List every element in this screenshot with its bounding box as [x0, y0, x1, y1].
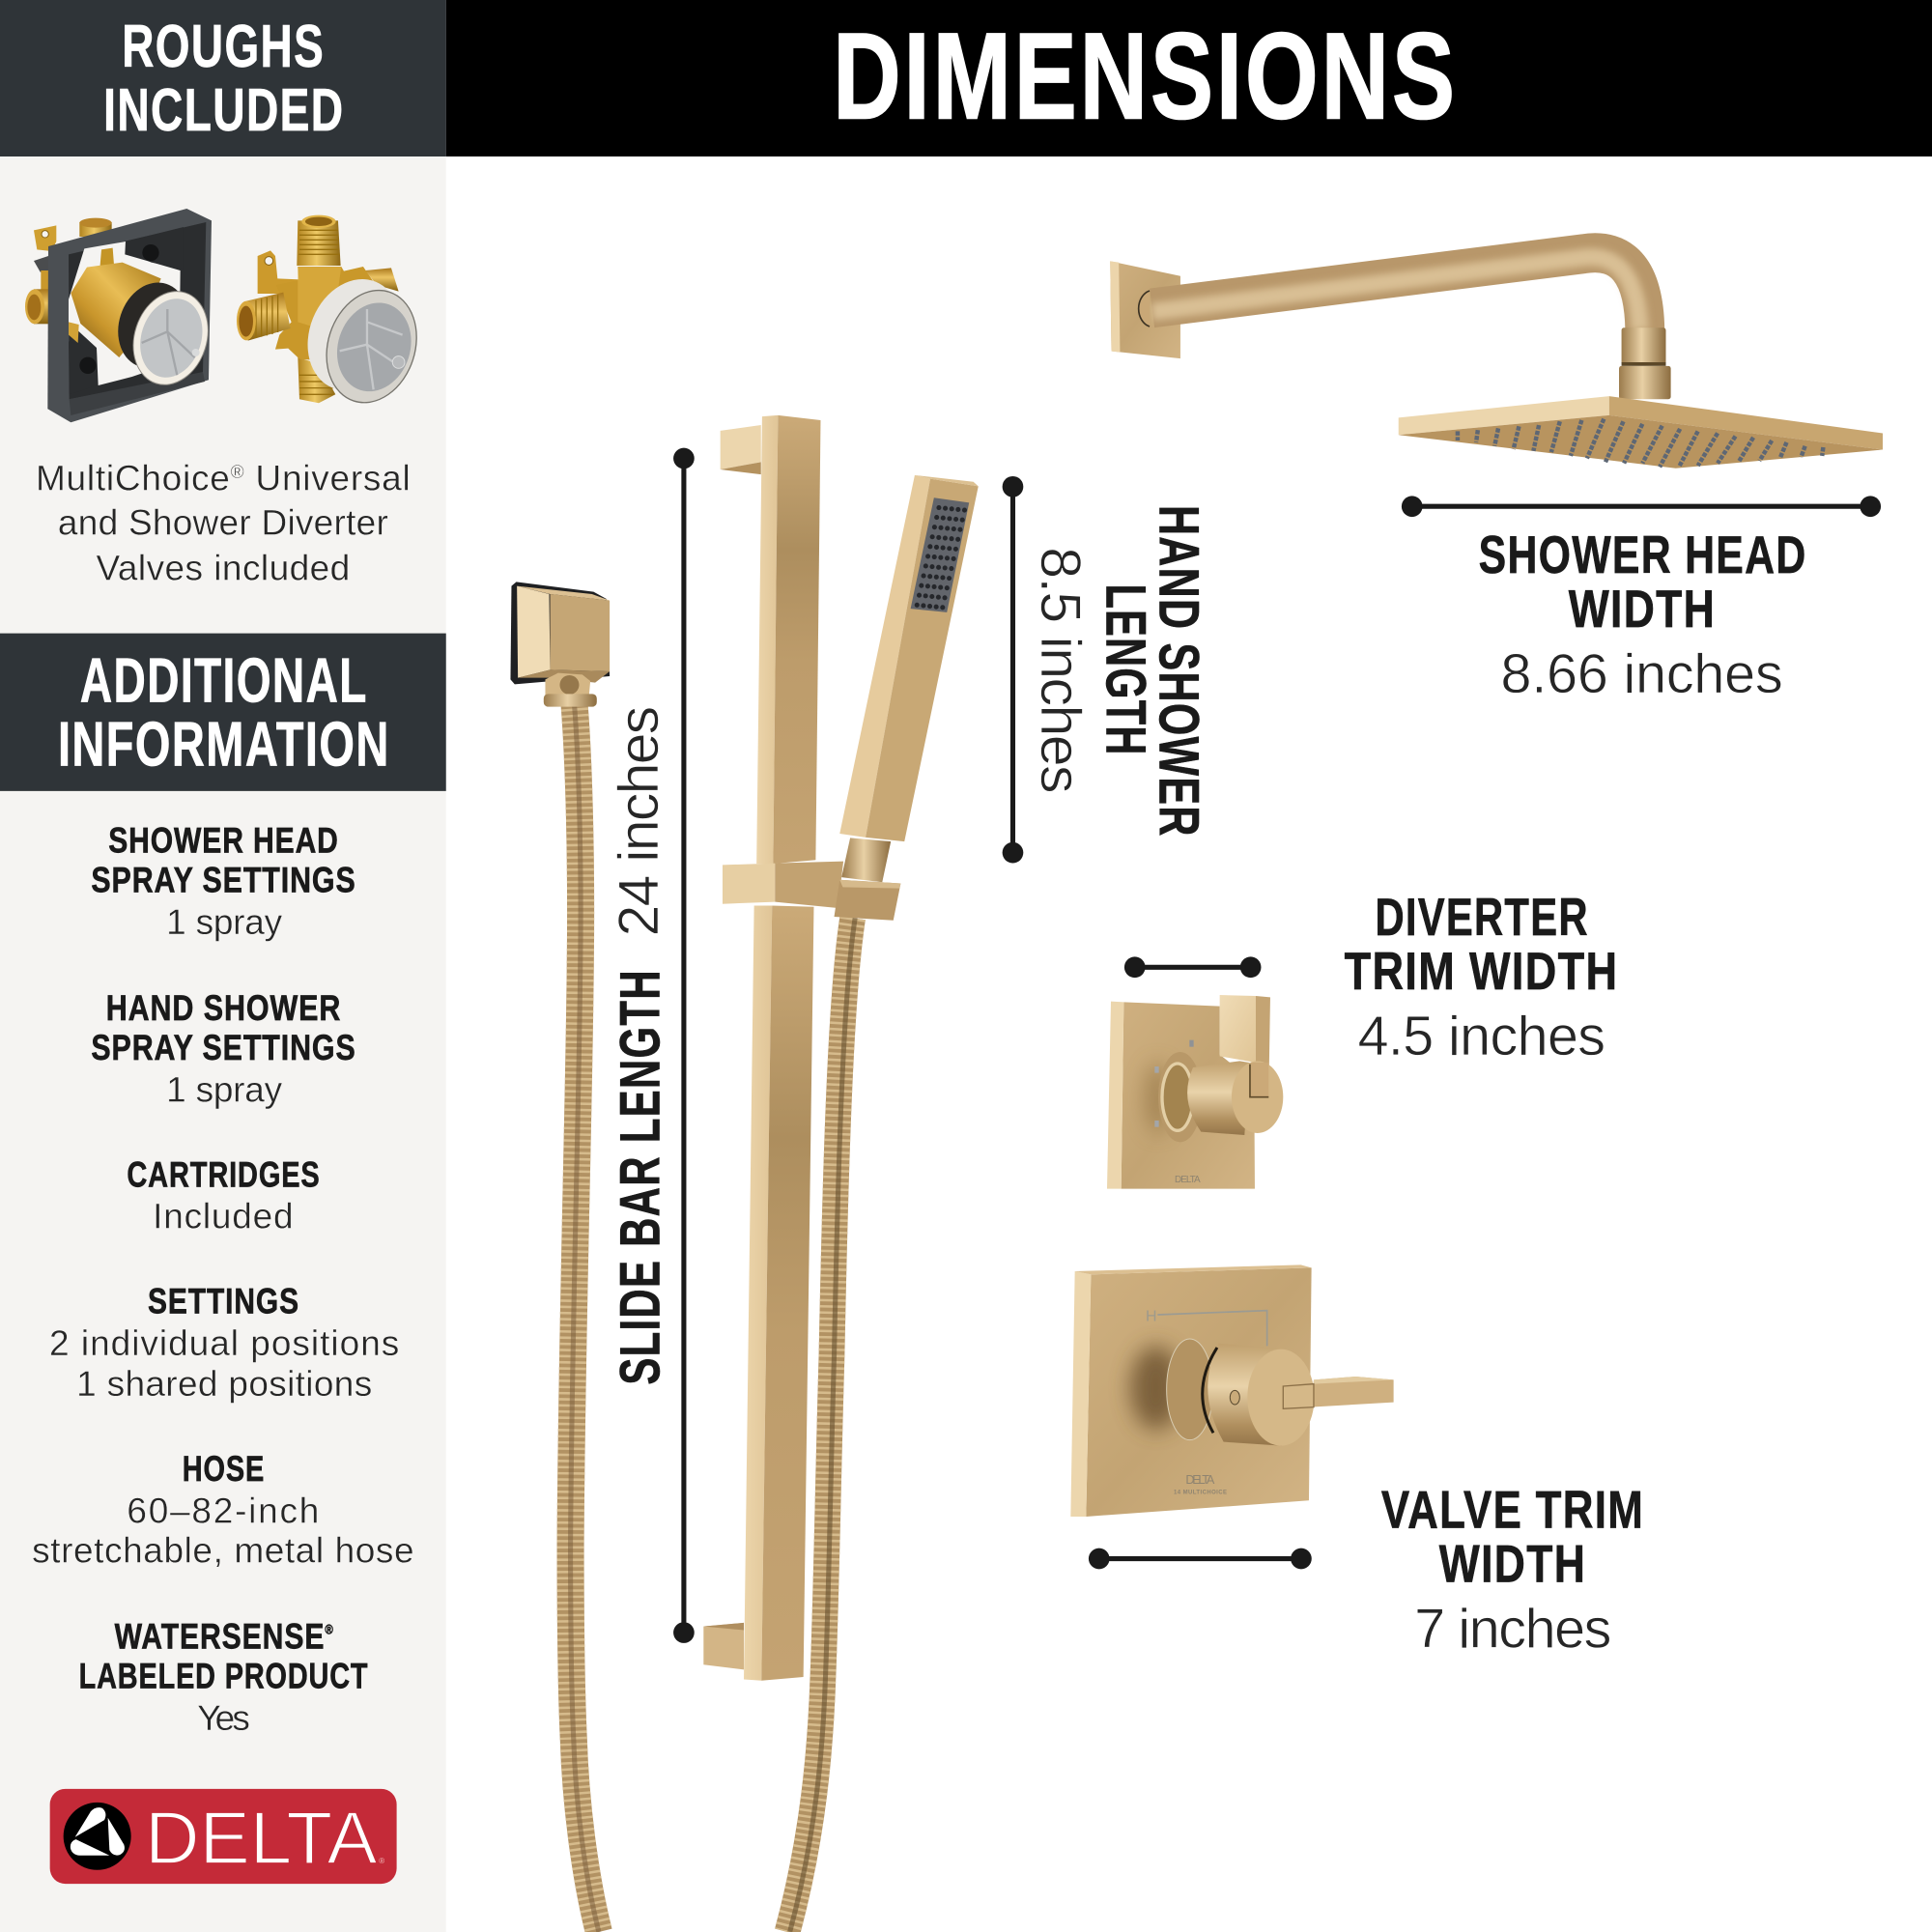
spec: settings: [49, 1282, 399, 1404]
text: rough valves description: ®: [231, 463, 244, 483]
icon: rough valve in mounting frame: [25, 209, 219, 422]
dimension: hand shower length: [1003, 476, 1209, 863]
icon: right hose: [787, 918, 855, 1932]
wall outlet block: [510, 582, 610, 707]
text: rough valves description: and Shower Diverter: [58, 503, 388, 543]
spec: cartridges: CARTRIDGES: [127, 1154, 321, 1194]
spec: cartridges: Included: [153, 1197, 294, 1236]
icon: slide bar collar and holder: [723, 838, 900, 921]
logo: delta: DELTA: [145, 1797, 378, 1880]
icon: diverter trim: DELTA: [1175, 1175, 1201, 1185]
dimension: hand shower length: LENGTH: [1094, 584, 1156, 756]
spec: settings: 1 shared positions: [76, 1364, 372, 1404]
spec: hose: [32, 1449, 414, 1570]
spec: watersense: Yes: [197, 1698, 250, 1738]
dimension: valve trim width: 7 inches: [1414, 1598, 1611, 1660]
spec: settings: SETTINGS: [148, 1282, 299, 1321]
spec: shower head spray settings: SPRAY SETTINGS: [91, 860, 356, 899]
spec: shower head spray settings: [91, 821, 356, 942]
icon: valve trim: DELTA: [1185, 1473, 1215, 1487]
icon: wall outlet and left hose: [510, 582, 610, 1932]
header: additional information: [0, 634, 446, 791]
title banner: dimensions: [446, 0, 1932, 156]
dimension: shower head width: 8.66 inches: [1501, 643, 1783, 705]
spec: hand shower spray settings: [91, 988, 356, 1109]
dimension: valve trim width: [1089, 1480, 1644, 1660]
text: rough valves description: Valves included: [96, 549, 350, 588]
dimension: slide bar length: [608, 448, 695, 1643]
icon: shower arm and rain head: [1110, 253, 1883, 469]
text: rough valves description: Universal: [244, 459, 411, 498]
icon: diverter trim: [1107, 995, 1283, 1189]
icon: valve trim: H: [1146, 1309, 1157, 1325]
spec: cartridges: [127, 1154, 321, 1236]
dimension: hand shower length: 8.5 inches: [1029, 547, 1092, 793]
spec: hand shower spray settings: SPRAY SETTINGS: [91, 1028, 356, 1067]
icon: hand shower: [839, 475, 979, 841]
spec: watersense: [79, 1617, 368, 1738]
title banner: dimensions: DIMENSIONS: [833, 8, 1458, 145]
logo: delta: ®: [379, 1857, 384, 1865]
logo: delta: [50, 1789, 397, 1884]
spec: shower head spray settings: SHOWER HEAD: [108, 821, 339, 861]
dimension: valve trim width: WIDTH: [1439, 1534, 1586, 1594]
icon: valve trim: [1070, 1264, 1394, 1517]
spec: hose: stretchable, metal hose: [32, 1530, 414, 1570]
spec: hand shower spray settings: HAND SHOWER: [106, 988, 341, 1028]
spec: hand shower spray settings: 1 spray: [166, 1069, 283, 1109]
header: roughs included: ROUGHS: [122, 13, 325, 80]
dimension: diverter trim width: [1124, 887, 1618, 1067]
dimension: diverter trim width: DIVERTER: [1375, 887, 1589, 947]
header: additional information: ADDITIONAL: [80, 644, 368, 715]
dimension: shower head width: WIDTH: [1569, 579, 1716, 639]
spec: shower head spray settings: 1 spray: [166, 902, 283, 942]
dimension: slide bar length: 24 inches: [608, 706, 670, 936]
spec: watersense: ®: [325, 1621, 334, 1636]
spec: settings: 2 individual positions: [49, 1323, 399, 1363]
spec: watersense: WATERSENSE: [115, 1617, 373, 1657]
dimension: diverter trim width: TRIM WIDTH: [1345, 941, 1618, 1001]
spec: hose: 60–82-inch: [127, 1492, 319, 1531]
dimension: valve trim width: VALVE TRIM: [1381, 1480, 1644, 1540]
text: rough valves description: [36, 459, 411, 588]
header: roughs included: INCLUDED: [103, 76, 345, 144]
spec: watersense: LABELED PRODUCT: [79, 1656, 368, 1695]
spec: hose: HOSE: [183, 1449, 265, 1489]
left sidebar panel: [0, 156, 446, 1932]
icon: valve trim: 14 MULTICHOICE: [1174, 1491, 1227, 1496]
dimension: slide bar length: SLIDE BAR LENGTH: [609, 969, 671, 1385]
header: roughs included: [0, 0, 446, 156]
dimension: diverter trim width: 4.5 inches: [1358, 1006, 1605, 1067]
icon: slide bar: [703, 415, 820, 1681]
dimension: hand shower length: HAND SHOWER: [1147, 505, 1209, 838]
dimension: shower head width: [1402, 496, 1881, 705]
header: additional information: INFORMATION: [58, 709, 390, 780]
icon: rough diverter valve: [237, 215, 431, 414]
text: rough valves description: MultiChoice: [36, 459, 230, 498]
spray nozzles: [1458, 419, 1823, 467]
dimension: shower head width: SHOWER HEAD: [1479, 525, 1807, 584]
